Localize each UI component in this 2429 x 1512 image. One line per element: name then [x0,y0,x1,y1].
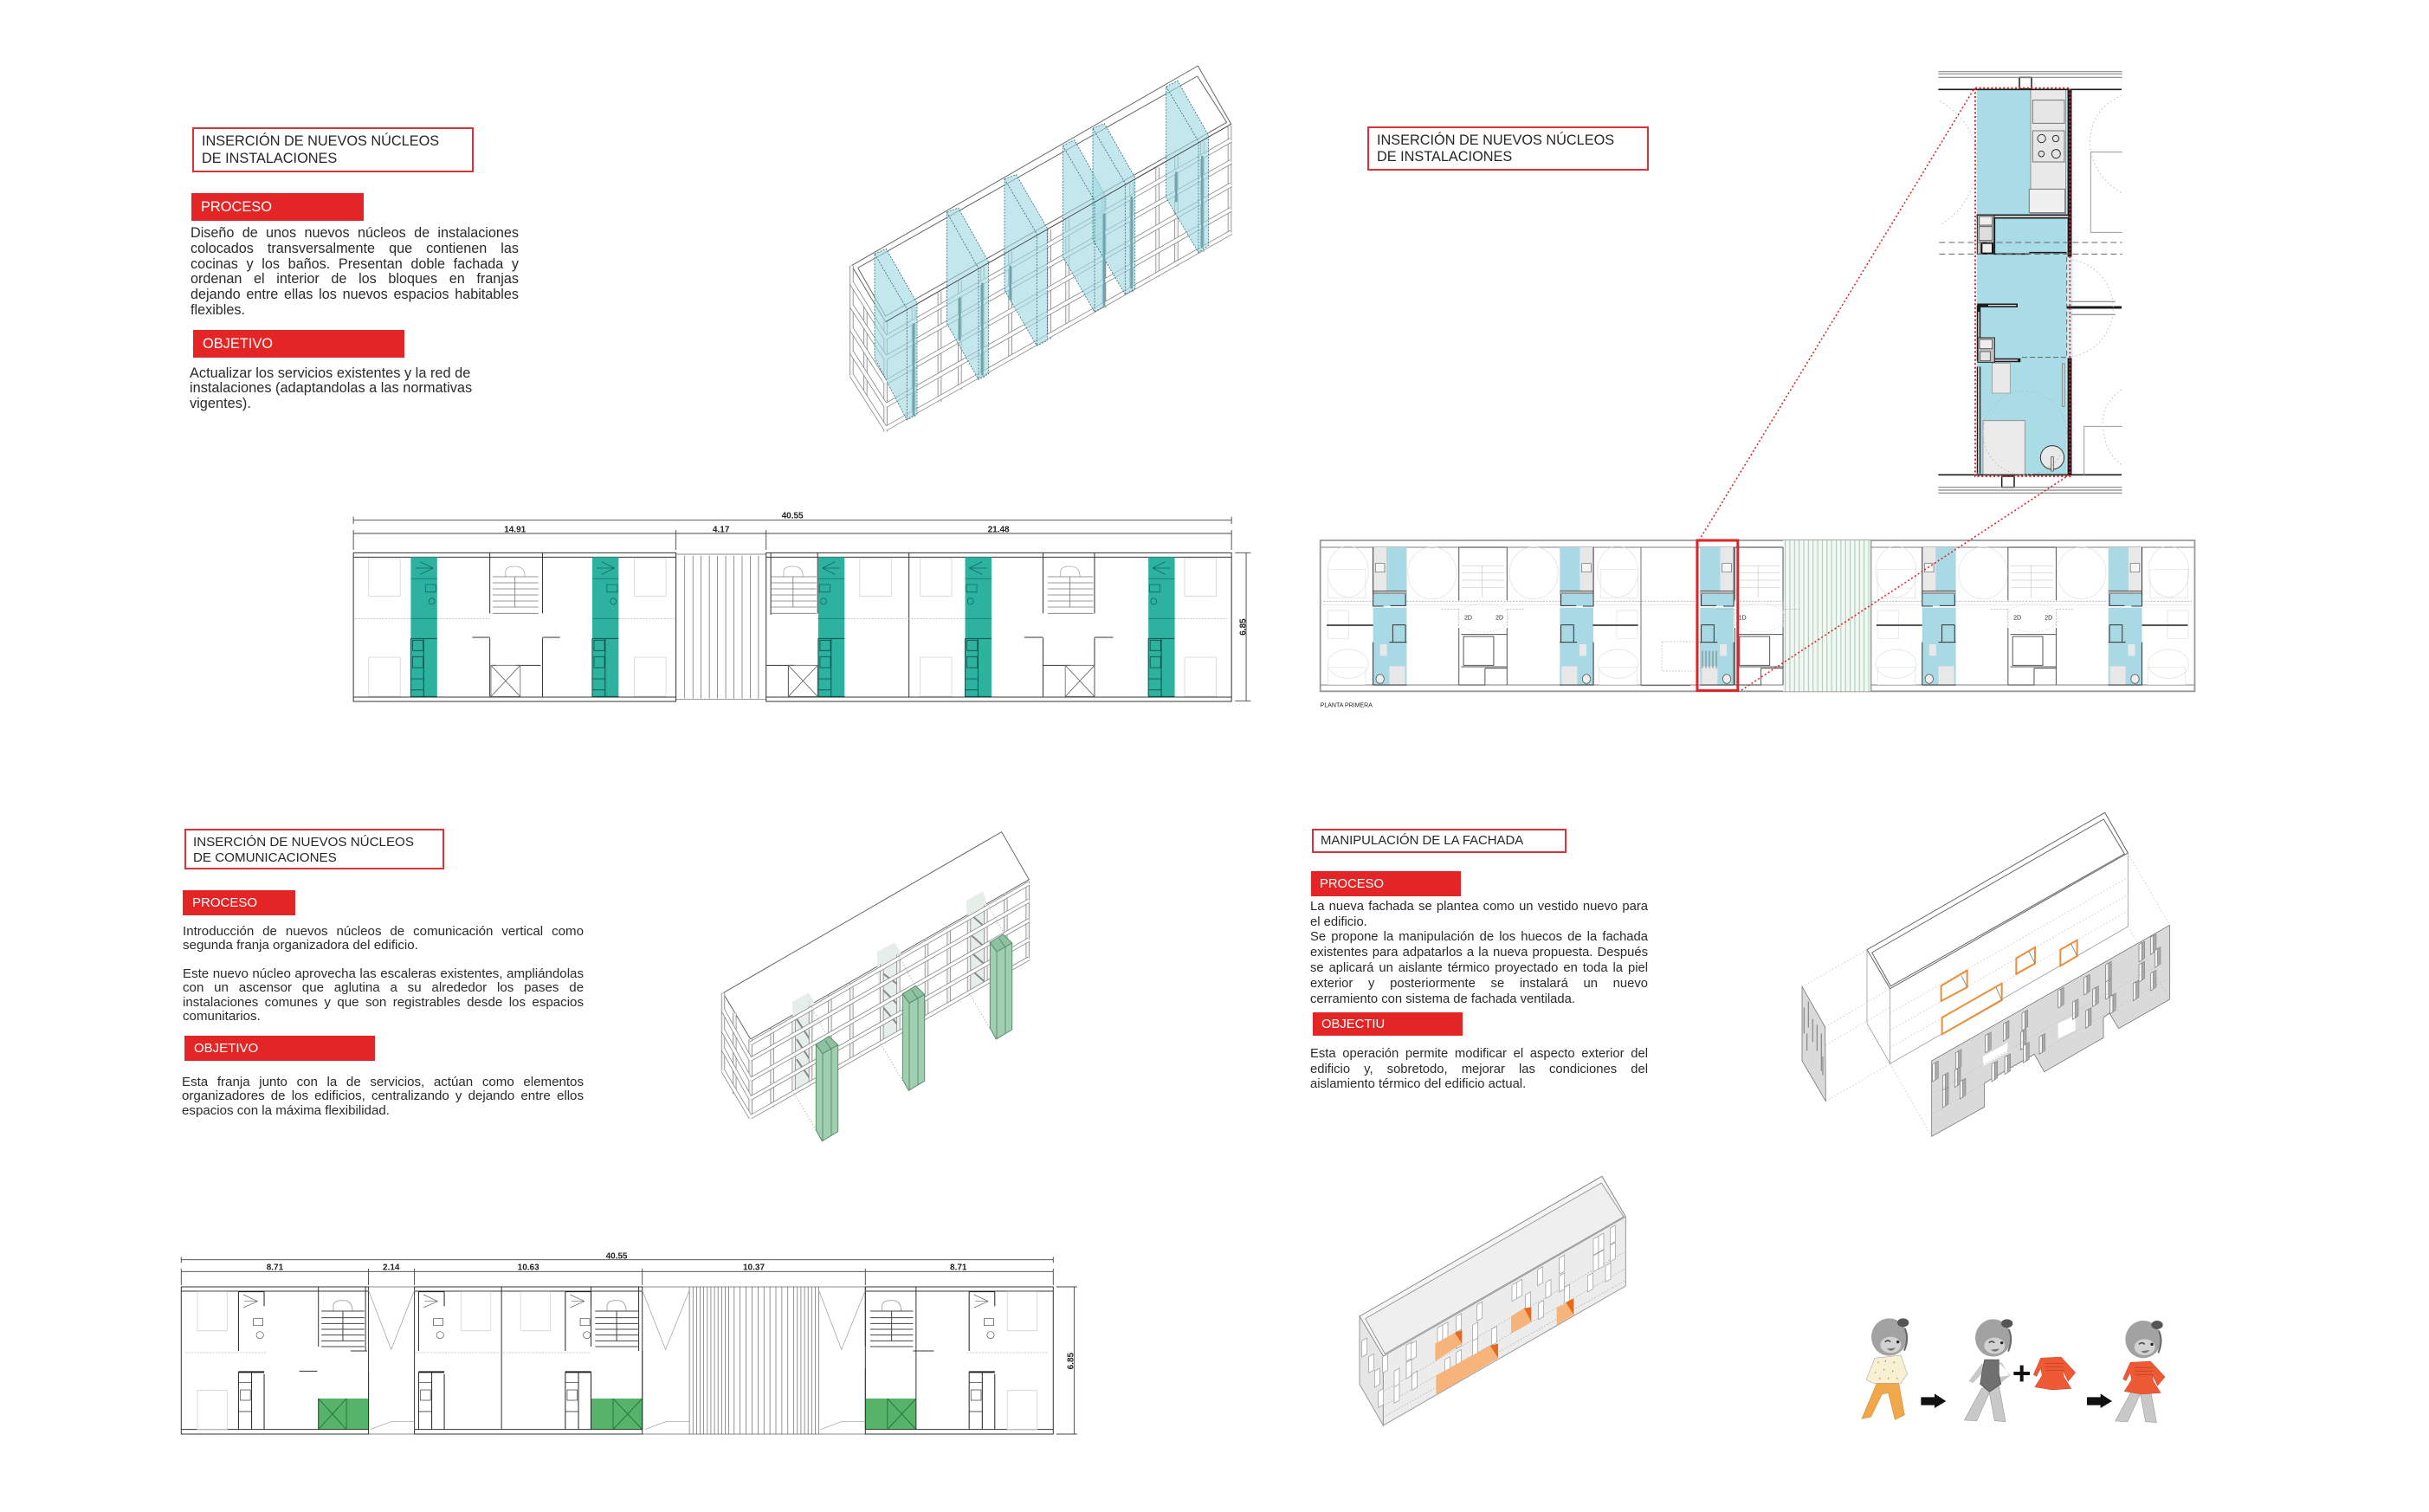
plan: first floor structure with green cores and dimensions [180,1251,1077,1435]
text: proceso [191,225,519,318]
label: objectiu: OBJECTIU [1321,1018,1385,1031]
room labels: 2D [1464,616,1472,622]
label: objetivo: OBJETIVO [194,1041,258,1056]
text: proceso: La nueva fachada se plantea como un vestido nuevo para [1310,900,1648,914]
blocks walls [181,1287,1053,1434]
label: proceso [183,890,295,915]
service strips [238,1292,264,1430]
volume outline [1867,812,2128,989]
dress [2033,1357,2076,1390]
text: objetivo: vigentes). [190,396,251,411]
furniture outlines [355,559,1227,696]
outer frame [1321,540,2194,691]
kitchen fixtures [2029,89,2066,214]
panel: text comunicaciones [182,829,584,1118]
heading: fachada: MANIPULACIÓN DE LA FACHADA [1321,834,1523,848]
facade panel front [1932,925,2170,1136]
text: proceso: el edificio. [1310,915,1367,929]
label: objetivo [193,330,404,358]
label: proceso [1311,871,1461,896]
text: proceso: cerramiento con sistema de fachada ventilada. [1310,992,1575,1006]
axonometric: structure with green vertical cores [720,831,1030,1141]
text: proceso [183,924,584,1024]
dimension labels: 10.63 [518,1263,539,1273]
blue service bands [875,81,1209,420]
plan: dwelling detail with blue core [1938,71,2122,494]
dotted connectors [1802,853,2170,1136]
axonometric: finished facade with orange openings [1359,1176,1626,1427]
stairs and lifts [493,566,539,613]
text: proceso: exterior y posteriormente se instalará un nuevo [1310,977,1648,991]
plus sign [2013,1366,2030,1381]
teal cores [410,557,437,696]
text: proceso: con un ascensor que aglutina a su alrededor los pases de [183,980,584,995]
label: proceso: PROCESO [1320,877,1384,891]
heading: instalaciones right [1367,126,1649,171]
panel: text instalaciones [190,127,519,411]
text: proceso: ordenan el interior de los bloques en franjas [191,271,519,287]
windows [1394,1368,1399,1387]
dashes and swing arcs [1939,95,2122,475]
dimension labels: 40.55 [782,512,804,521]
orange openings [1435,1302,1573,1395]
red dotted callout lines [1699,89,2070,691]
heading: comunicaciones: INSERCIÓN DE NUEVOS NÚCLEOS [193,835,414,850]
text: objetivo [190,365,472,411]
green cores [816,1037,838,1141]
stair blocks [1442,547,1524,685]
text: proceso [1310,900,1648,1006]
label: proceso [191,193,364,221]
heading: instalaciones right: INSERCIÓN DE NUEVOS NÚCLEOS [1377,132,1614,147]
walls and baths [1938,77,2122,488]
central passage stripes [676,554,766,699]
label: proceso: PROCESO [201,199,272,215]
text: proceso: Introducción de nuevos núcleos de comunicación vertical como [183,924,584,939]
text: proceso: Diseño de unos nuevos núcleos de instalaciones [191,225,519,241]
text: proceso: Se propone la manipulación de los huecos de la fachada [1310,930,1648,944]
text: objetivo: Actualizar los servicios existentes y la red de [190,365,470,381]
plan: planta primera with blue cores [1320,539,2196,709]
text: proceso: instalaciones comunes y que son registrables desde los espacios [183,995,584,1010]
text: objetivo: organizadores de los edificios, centralizando y dejando entre ellos [182,1089,584,1103]
text: objectiu: edificio y, sobretodo, mejorar las condiciones del [1310,1063,1648,1076]
heading: fachada [1312,829,1567,853]
green cores [319,1399,916,1430]
plan caption: PLANTA PRIMERA [1321,703,1373,709]
dimension labels: 4.17 [713,526,730,535]
room furniture [1328,546,2189,685]
text: proceso: flexibles. [191,302,245,318]
heading: comunicaciones [184,829,444,869]
heading: instalaciones: DE INSTALACIONES [202,151,337,166]
child in pyjama [1862,1318,1909,1419]
blocks walls [353,552,1231,701]
text: proceso: Este nuevo núcleo aprovecha las escaleras existentes, ampliándolas [183,966,584,981]
label: objectiu [1313,1012,1463,1036]
text: proceso: dejando entre ellas los nuevos espacios habitables [191,287,519,302]
room labels [1464,616,2052,622]
text: proceso: existentes para adpatarlos a la nueva propuesta. Después [1310,946,1648,960]
dimension labels: 14.91 [504,526,526,535]
label: objetivo [184,1036,375,1061]
furniture outlines [185,1292,1049,1430]
stripes walkway [369,1287,865,1435]
text: proceso: comunitarios. [183,1009,261,1024]
dimension labels: 6.85 [1067,1353,1076,1369]
heading: instalaciones: INSERCIÓN DE NUEVOS NÚCLEOS [202,133,439,149]
dimension labels: 8.71 [950,1263,967,1273]
axonometric: structure with blue service bands [850,66,1232,431]
stair shadows [792,891,986,1093]
red dotted outline [1975,88,2070,476]
plan: first floor structure with teal cores and dimensions [353,512,1250,701]
orange openings [1941,940,2077,1034]
dimension labels: 6.85 [1238,618,1248,636]
red selection frame [1697,540,1738,690]
facade panel end [1802,986,1825,1102]
text: objectiu [1310,1047,1648,1091]
text: proceso: colocados transversalmente que contienen las [191,241,519,256]
blue cores [1373,547,1406,685]
dimension labels [504,512,1248,636]
panel: text fachada [1310,829,1648,1091]
dimension labels: 2.14 [383,1263,400,1273]
text: objectiu: aislamiento térmico del edificio actual. [1310,1077,1526,1091]
text: objetivo [182,1075,584,1118]
stairs [321,1301,365,1347]
central green stripes [1783,540,1871,691]
text: objetivo: instalaciones (adaptandolas a las normativas [190,380,472,396]
text: objectiu: Esta operación permite modificar el aspecto exterior del [1310,1047,1648,1061]
room labels: 1D [1739,616,1747,622]
text: proceso: cocinas y los baños. Presentan doble fachada y [191,256,519,272]
heading: comunicaciones: DE COMUNICACIONES [193,850,337,865]
heading: instalaciones [192,127,474,172]
illustration: child changing clothes analogy [1862,1318,2165,1423]
room labels: 2D [1496,616,1503,622]
text: proceso: se aplicará un aislante térmico proyectado en toda la piel [1310,961,1648,975]
highlighted detail [1702,651,1716,669]
text: objetivo: espacios con la máxima flexibilidad. [182,1103,390,1118]
dimension labels: 40.55 [606,1251,628,1261]
door strips [1327,624,2187,626]
text: proceso: segunda franja organizadora del edificio. [183,938,418,953]
child in red dress [2116,1321,2165,1423]
label: proceso: PROCESO [192,895,257,910]
dimension labels [267,1251,1076,1369]
dimension labels: 8.71 [267,1263,284,1273]
dimension labels: 10.37 [743,1263,765,1273]
party walls [1641,540,1871,691]
dimension lines [353,517,1250,701]
dimension lines [181,1257,1077,1434]
arrow [1921,1393,1946,1408]
label: objetivo: OBJETIVO [203,336,273,352]
bath furniture [1993,363,2010,393]
dimension labels: 21.48 [988,526,1010,535]
axonometric: exploded facade [1801,812,2170,1137]
room labels: 2D [2013,616,2021,622]
child in swimsuit [1964,1319,2012,1422]
arrow [2087,1393,2112,1408]
text: objetivo: Esta franja junto con la de servicios, actúan como elementos [182,1075,584,1089]
room labels: 2D [2045,616,2052,622]
heading: instalaciones right: DE INSTALACIONES [1377,149,1512,165]
